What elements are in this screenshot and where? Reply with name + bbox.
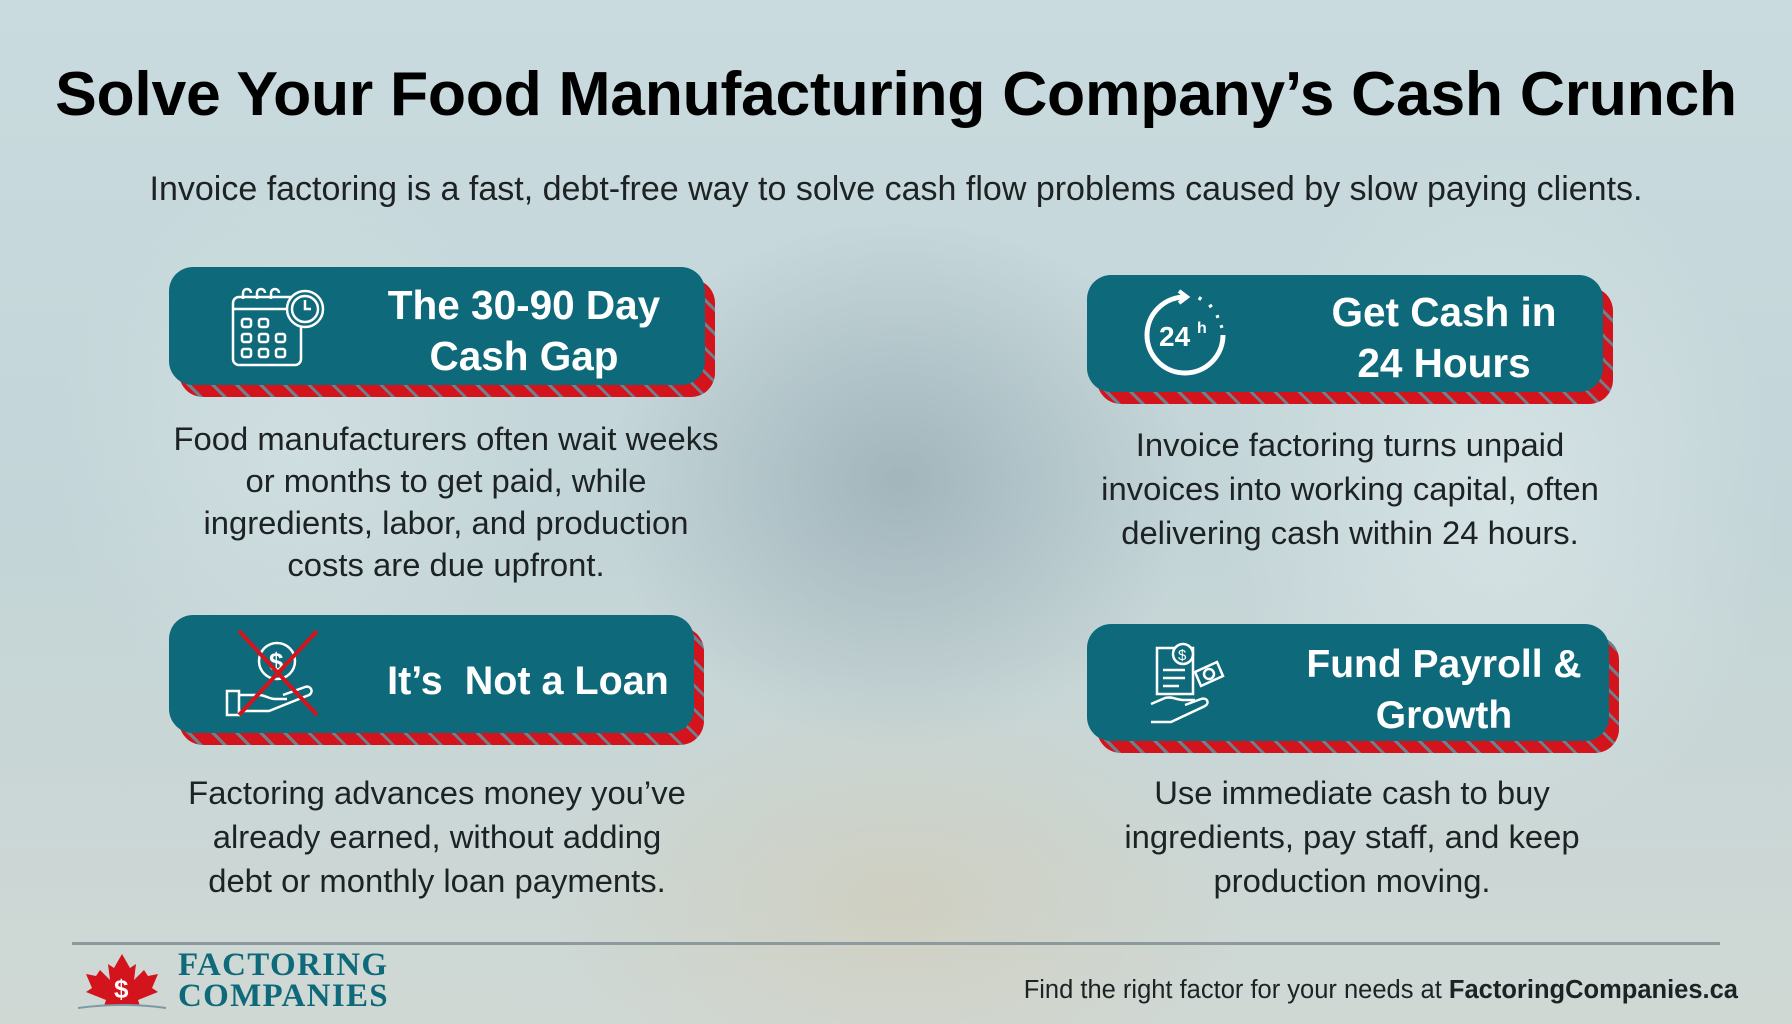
- icon: invoice with money: $: [1178, 647, 1187, 664]
- text: cash gap: ingredients, labor, and production: [203, 504, 688, 541]
- footer divider: [72, 942, 1720, 945]
- heading: It’s Not a Loan: [387, 659, 669, 703]
- icon: crossed out money hand: $: [269, 647, 284, 677]
- text: fund payroll: Use immediate cash to buy: [1154, 774, 1550, 811]
- heading: 24 Hours: [1357, 340, 1531, 386]
- icon: 24h clock: [1144, 289, 1226, 376]
- heading: Growth: [1376, 694, 1512, 737]
- icon: calendar with clock: [232, 288, 324, 366]
- text: not a loan: already earned, without adding: [213, 818, 661, 855]
- logo: COMPANIES: [178, 978, 389, 1014]
- heading: [388, 282, 660, 379]
- heading: [1306, 643, 1582, 737]
- card: get cash in 24 hours: [1087, 275, 1613, 404]
- text: cash gap: costs are due upfront.: [287, 546, 605, 583]
- text: cash gap: [173, 420, 719, 583]
- logo: [78, 947, 389, 1014]
- text: cash gap: Food manufacturers often wait weeks: [173, 420, 719, 457]
- title: Solve Your Food Manufacturing Company’s Cash Crunch: [55, 59, 1737, 129]
- text: cash in 24 hours: Invoice factoring turns unpaid: [1136, 426, 1564, 463]
- heading: Fund Payroll &: [1306, 643, 1582, 686]
- heading: Get Cash in: [1331, 289, 1557, 335]
- icon: 24h clock: 24: [1159, 321, 1191, 352]
- text: not a loan: Factoring advances money you’ve: [188, 774, 686, 811]
- footer text: Find the right factor for your needs at FactoringCompanies.ca: [1024, 976, 1738, 1004]
- text: cash gap: or months to get paid, while: [245, 462, 647, 499]
- icon: crossed out money hand: [226, 630, 318, 716]
- icon: 24h clock: h: [1197, 320, 1207, 337]
- text: fund payroll: [1124, 774, 1580, 899]
- text: cash in 24 hours: [1101, 426, 1599, 551]
- subtitle: Invoice factoring is a fast, debt-free way to solve cash flow problems caused by slow paying clients.: [150, 170, 1642, 208]
- heading: [1331, 289, 1557, 386]
- text: not a loan: debt or monthly loan payments.: [208, 862, 666, 899]
- text: cash in 24 hours: invoices into working capital, often: [1101, 470, 1599, 507]
- text: cash in 24 hours: delivering cash within 24 hours.: [1121, 514, 1579, 551]
- card: not a loan: [169, 615, 704, 745]
- card: 30-90 day cash gap: [169, 267, 715, 397]
- icon: maple leaf: $: [114, 974, 129, 1004]
- heading: The 30-90 Day: [388, 282, 660, 328]
- heading: Cash Gap: [429, 333, 619, 379]
- card: fund payroll & growth: [1087, 624, 1619, 753]
- text: fund payroll: production moving.: [1213, 862, 1491, 899]
- text: fund payroll: ingredients, pay staff, and keep: [1124, 818, 1580, 855]
- text: not a loan: [188, 774, 686, 899]
- icon: invoice with money: [1150, 642, 1225, 724]
- logo: FACTORING: [178, 947, 388, 983]
- icon: maple leaf: [78, 954, 166, 1009]
